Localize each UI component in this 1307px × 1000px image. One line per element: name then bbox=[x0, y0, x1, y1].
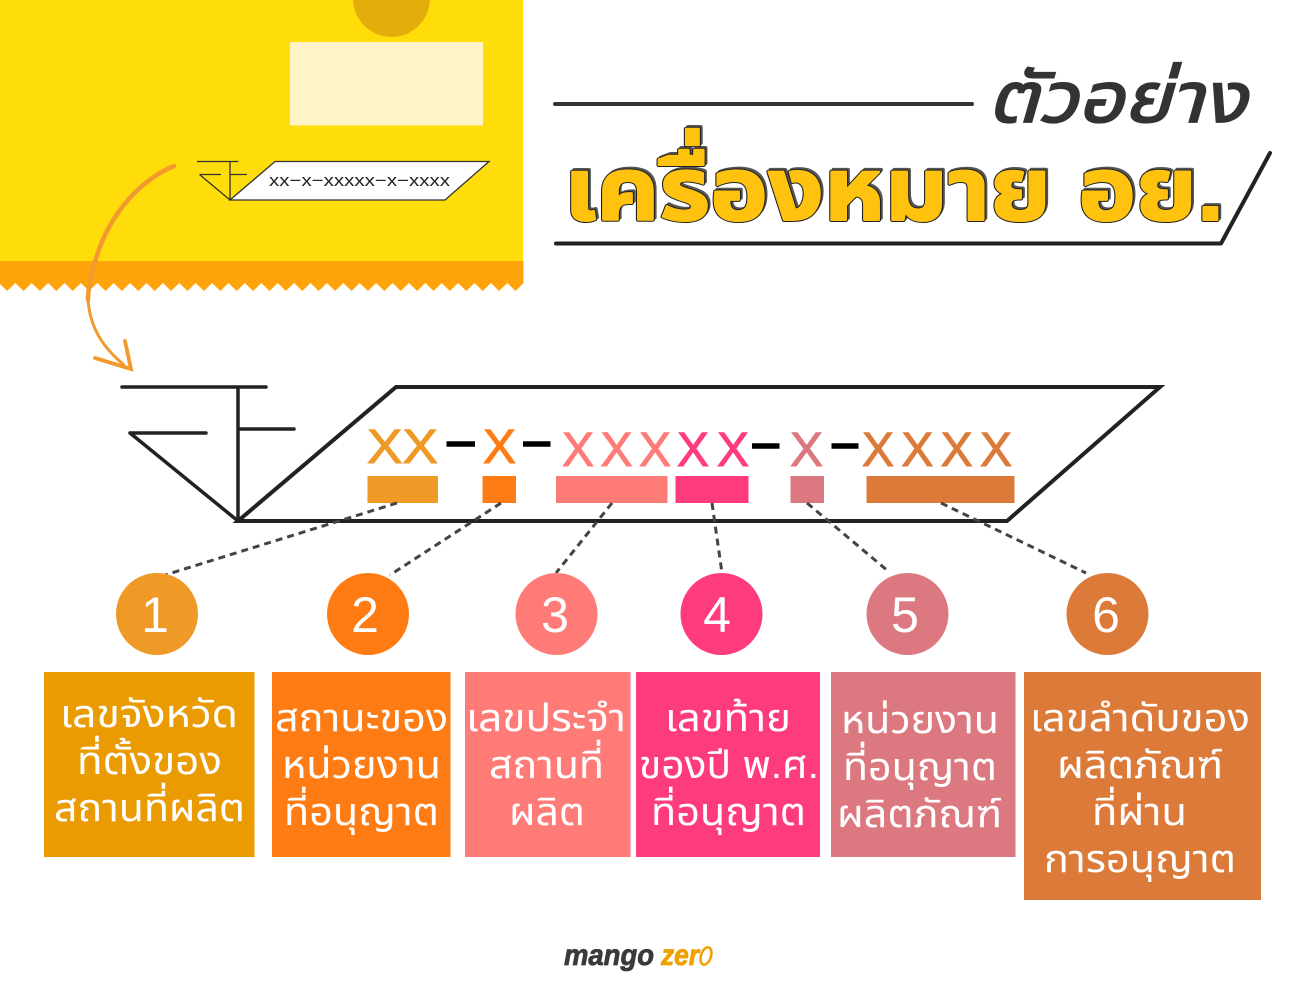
title: line one: ตัวอย่าง bbox=[987, 59, 1250, 137]
segment 5 letter: X bbox=[790, 424, 823, 477]
number badge 5 bbox=[866, 573, 948, 655]
number badge 4 bbox=[680, 573, 762, 655]
box 1: province code: ที่ตั้งของ bbox=[77, 735, 222, 783]
box 6: product sequence: เลขลำดับของ bbox=[1030, 698, 1250, 740]
box 1: province code bbox=[44, 672, 254, 857]
number badge 3: 3 bbox=[541, 587, 569, 643]
box 3: site number: ผลิต bbox=[509, 792, 585, 834]
segment 2 letter: X bbox=[483, 421, 516, 474]
box 4: year digits: ของปี พ.ศ. bbox=[639, 745, 819, 787]
colour key bars bbox=[368, 476, 1014, 503]
dashes bbox=[446, 444, 858, 446]
box 2: authority status bbox=[272, 672, 450, 857]
box 6: product sequence bbox=[1024, 672, 1261, 900]
small FDA mark: xx−x−xxxxx−x−xxxx bbox=[269, 171, 451, 190]
segment 6 letters: XXXX bbox=[862, 424, 1012, 477]
box 5: product authority: ผลิตภัณฑ์ bbox=[837, 794, 1002, 836]
box 2: authority status: สถานะของ bbox=[275, 698, 448, 740]
panel: yellow envelope bbox=[0, 0, 524, 291]
number badge 3 bbox=[516, 573, 598, 655]
box 3: site number: เลขประจำ bbox=[466, 698, 626, 740]
segment 1 letters: XX bbox=[367, 421, 438, 474]
title: line two: เครื่องหมาย อย. bbox=[566, 126, 1226, 237]
box 5: product authority bbox=[831, 672, 1016, 857]
number badge 4: 4 bbox=[703, 587, 731, 643]
box 6: product sequence: การอนุญาต bbox=[1044, 839, 1236, 882]
box 6: product sequence: ผลิตภัณฑ์ bbox=[1057, 745, 1223, 787]
box 6: product sequence: ที่ผ่าน bbox=[1092, 786, 1187, 834]
box 5: product authority: หน่วยงาน bbox=[841, 700, 999, 742]
logo: mango zero: mango bbox=[564, 939, 654, 972]
dashed connectors bbox=[165, 503, 1086, 575]
number badge 1 bbox=[116, 573, 198, 655]
envelope address label bbox=[290, 42, 483, 126]
box 1: province code: เลขจังหวัด bbox=[60, 694, 238, 736]
title: line two: เครื่องหมาย อย. bbox=[564, 128, 1224, 239]
segment 4 letters: XX bbox=[677, 424, 749, 477]
logo: mango zero bbox=[564, 939, 714, 972]
box 5: product authority: ที่อนุญาต bbox=[843, 741, 997, 790]
number badge 1: 1 bbox=[141, 587, 169, 643]
number pattern bbox=[367, 421, 1012, 477]
segment 3 letters: XXX bbox=[562, 424, 671, 477]
arrow: from small mark down to enlarged mark bbox=[88, 166, 174, 369]
box 3: site number: สถานที่ bbox=[489, 739, 604, 787]
number badge 6 bbox=[1066, 573, 1148, 655]
box 4: year digits: ที่อนุญาต bbox=[651, 786, 806, 835]
title rule top bbox=[555, 102, 972, 106]
envelope seal bbox=[353, 0, 430, 37]
title: line two: เครื่องหมาย อย. bbox=[564, 128, 1224, 239]
small FDA mark bbox=[197, 162, 489, 200]
box 3: site number bbox=[465, 672, 630, 857]
box 4: year digits bbox=[636, 672, 820, 857]
large FDA mark bbox=[122, 387, 1160, 521]
title rule bottom with slash bbox=[556, 153, 1270, 244]
box 1: province code: สถานที่ผลิต bbox=[54, 782, 245, 830]
number badge 2: 2 bbox=[351, 587, 379, 643]
box 2: authority status: ที่อนุญาต bbox=[284, 786, 439, 835]
number badge 5: 5 bbox=[891, 587, 919, 643]
number badge 6: 6 bbox=[1092, 587, 1120, 643]
logo: mango zero: zer bbox=[660, 939, 701, 972]
box 2: authority status: หน่วยงาน bbox=[282, 745, 441, 787]
box 4: year digits: เลขท้าย bbox=[665, 698, 791, 740]
number badge 2 bbox=[327, 573, 409, 655]
